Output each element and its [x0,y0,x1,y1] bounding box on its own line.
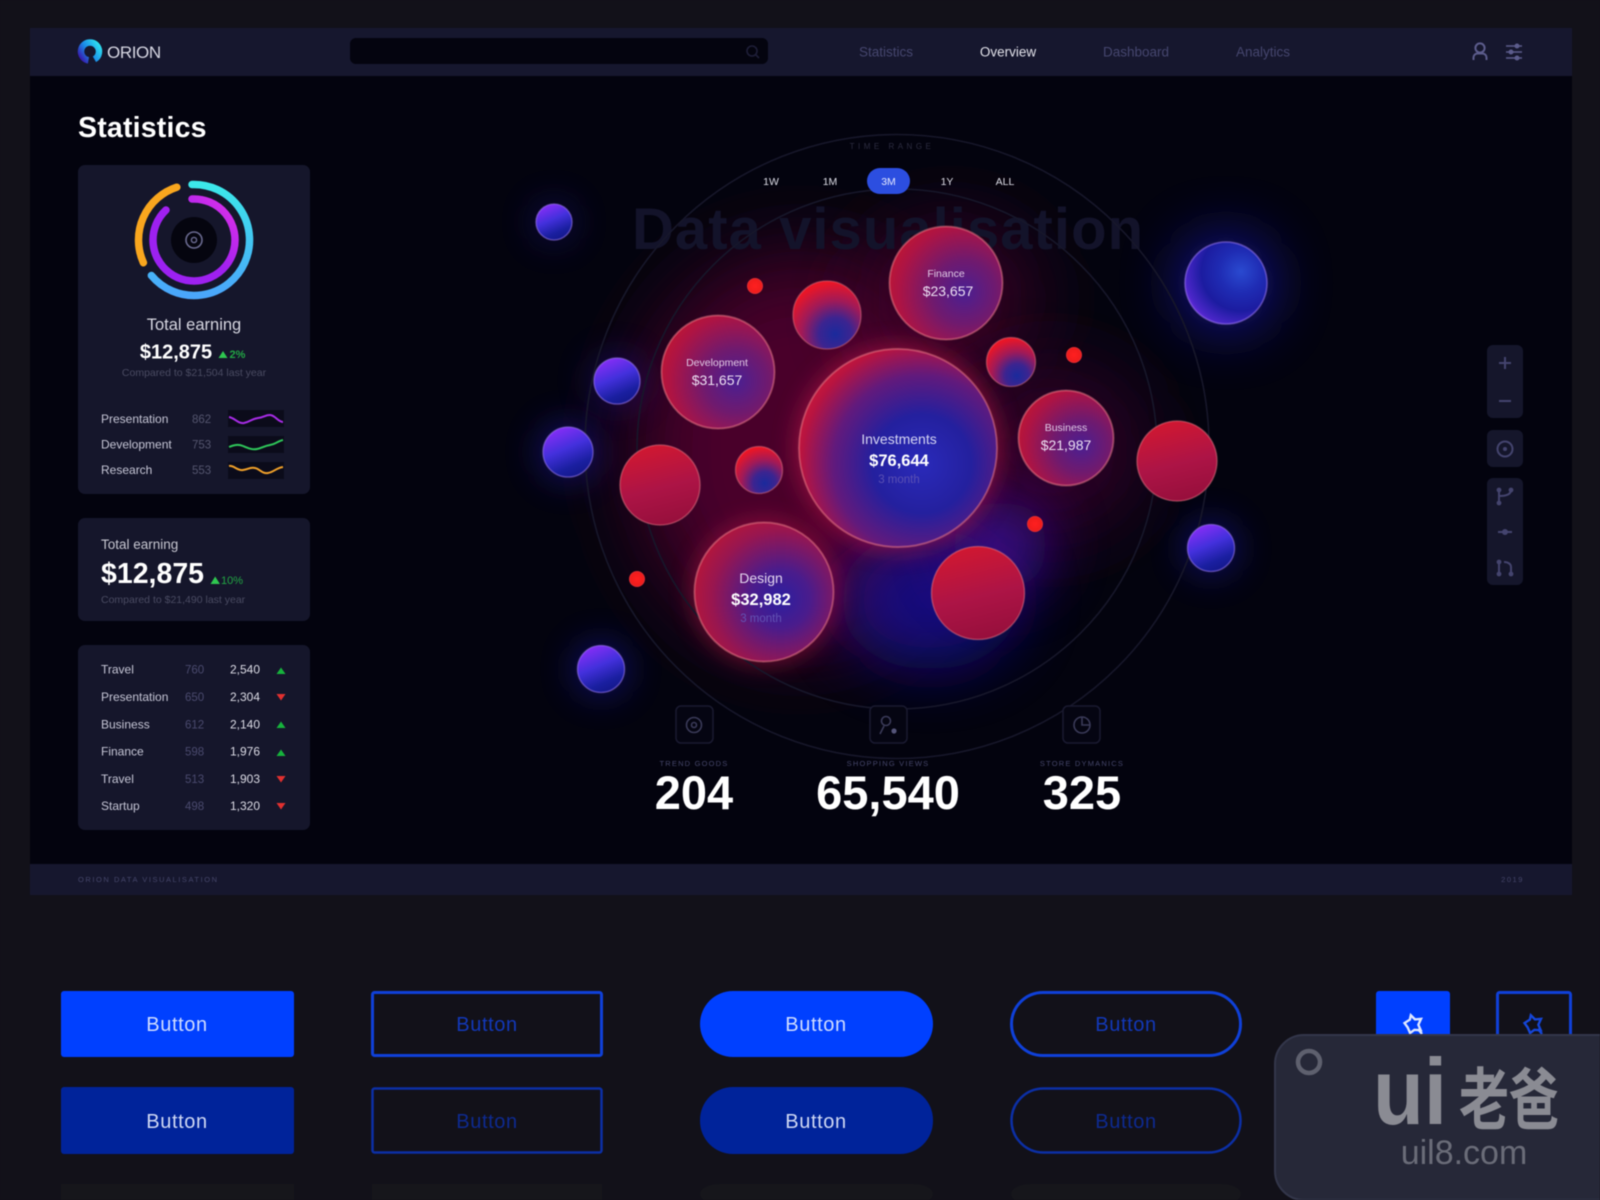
row: Startup: 498 [185,801,204,813]
row: Presentation: Presentation [101,412,168,426]
row: Startup: 1,320 [230,799,260,813]
dot: red lower left [629,571,645,587]
label: Total earning [101,537,178,552]
row: Presentation: Presentation [101,690,168,704]
icon: target [676,706,713,743]
option: 3M active [867,168,910,194]
row: Development: Development [101,438,172,452]
value: 325 [1043,766,1121,819]
tool group: branches [1487,478,1523,585]
stat: store dynamics [1040,706,1124,819]
row: Finance: Finance [101,744,144,758]
site url: uil8.com [1401,1134,1527,1172]
stat: shopping views [816,706,960,819]
row: Travel: Travel [101,772,134,786]
row: Development [101,436,284,453]
bubble: Business [1018,390,1114,486]
bubble: Design: 3 month [740,613,782,625]
row: Finance: 598 [185,746,204,758]
row: Business [101,718,286,732]
row: Research: Research [101,463,152,477]
bubble: Investments: Investments [861,431,937,447]
logo text: CJK: 老爸 [1459,1047,1559,1144]
comparison note: Compared to $21,490 last year [101,594,246,606]
bubble: purple left [543,427,593,477]
bubble: small purple top left [536,204,572,240]
heading: Statistics: Statistics [78,112,207,144]
button: outline square dark: Button [456,1111,518,1133]
bubble: Finance: $23,657 [923,283,974,299]
dot: red lower right [1027,516,1043,532]
footer bar: 2019 [1501,875,1524,884]
change indicator: 10% [221,575,243,587]
row: Presentation: 862 [192,414,211,426]
total earning label: Total earning [147,316,241,334]
bubble: Design: $32,982 [731,591,791,609]
icon: user pin [870,706,907,743]
total earning value: 2% [230,349,246,361]
row: Travel [101,662,286,676]
row: Finance [101,744,286,758]
top navigation bar [30,28,1572,76]
bubble: Investments [799,349,997,547]
bubble: purple bottom left [578,646,624,692]
comparison note: Compared to $21,504 last year [122,367,267,379]
button: outline pill dark: Button [1095,1111,1157,1133]
bubble: mixed small centre left [736,446,782,494]
change indicator [210,575,243,587]
nav: Statistics: Statistics [859,44,913,60]
button: outline square: Button [456,1014,518,1036]
bubble: plain red left [620,445,700,525]
bubble chart [536,204,1267,692]
footer bar [30,864,1572,895]
option: 1M: 1M [823,176,837,188]
row: Presentation: 2,304 [230,690,260,704]
bubble: Investments: 3 month [878,474,920,486]
row: Presentation [101,690,286,704]
donut chart [139,184,250,295]
row: Travel: 2,540 [230,662,260,676]
bubble: Development: Development [686,357,748,369]
bubble: Finance: Finance [927,268,965,280]
button: outline pill dark [1012,1088,1240,1152]
badge hole [1298,1051,1320,1073]
value: 65,540 [816,766,960,819]
search bar [350,38,768,64]
icon: pie [1063,706,1100,743]
row: Travel [101,772,286,786]
button: filled square [61,991,294,1057]
option: 1W: 1W [763,176,779,188]
dashboard panel [30,28,1572,895]
card: total earning summary [78,518,310,621]
dot: red top [747,278,763,294]
icon button: filled [1376,991,1450,1057]
button: outline square dark [372,1088,602,1152]
row: Travel: 1,903 [230,772,260,786]
label: SHOPPING VIEWS [847,759,929,768]
button: filled square dark: Button [146,1111,208,1133]
button: filled pill: Button [785,1014,847,1036]
row: Presentation [101,410,284,427]
bubble: Development [662,316,774,428]
row: Startup: Startup [101,799,140,813]
row: Research [101,462,284,479]
button: outline pill: Button [1095,1014,1157,1036]
bubble: purple upper left [594,358,640,404]
bubble: Design [694,522,834,662]
bubble: Development: $31,657 [692,372,743,388]
watermark badge: uil8.com [1275,1035,1600,1200]
row: Travel: 513 [185,774,204,786]
logo text: ui: ui [1373,1039,1447,1144]
total earning value: $12,875 [140,342,212,364]
row: Finance: 1,976 [230,744,260,758]
row: Business: 612 [185,720,204,732]
footer bar: ORION DATA VISUALISATION [78,875,219,884]
tool: target [1487,430,1523,467]
row: Travel: 760 [185,664,204,676]
bubble: large purple right [1185,242,1267,324]
bubble: Business: $21,987 [1041,437,1092,453]
faint third button row [61,1184,1241,1200]
row: Research: 553 [192,465,211,477]
nav: Overview: Overview [980,44,1036,60]
nav: Analytics: Analytics [1236,44,1290,60]
stat: trend goods [655,706,733,819]
time range selector [763,142,1014,194]
button: filled pill dark [700,1087,933,1154]
icon: user [1474,43,1486,60]
value: $12,875 [101,558,204,590]
icon: sliders [1506,44,1522,60]
bubble: plain red bottom [932,546,1024,640]
row: Business: 2,140 [230,718,260,732]
row: Startup [101,799,286,813]
bubble: mixed small right [986,338,1036,386]
logo: Orion: ORION [107,43,161,62]
button: outline pill [1012,992,1240,1056]
row: Presentation: 650 [185,692,204,704]
bubble: Design: Design [739,570,783,586]
value: 204 [655,766,733,819]
total earning value [140,342,246,364]
icon button: outline [1498,992,1570,1056]
background glow [534,202,1272,695]
button: filled pill [700,991,933,1057]
label: STORE DYMANICS [1040,759,1124,768]
row: Business: Business [101,718,150,732]
dot: red right [1066,347,1082,363]
option: 3M active: 3M [881,176,896,188]
logo: Orion [80,41,161,62]
button: filled pill dark: Button [785,1111,847,1133]
bubble: plain red right [1137,421,1217,501]
bubble: mixed top [793,281,861,349]
label: TREND GOODS [659,759,729,768]
option: 1Y: 1Y [941,176,953,188]
title watermark: Data visualisation: Data visualisation [632,197,1143,262]
row: Development: 753 [192,440,211,452]
time range label: TIME RANGE [850,142,934,151]
tool group: zoom [1487,345,1523,418]
button: outline square [372,992,602,1056]
bubble: purple lower right [1188,524,1234,572]
bubble: Investments: $76,644 [869,452,930,470]
option: ALL: ALL [996,176,1014,188]
row: Travel: Travel [101,662,134,676]
card: category table [78,645,310,830]
orbit rings [585,134,1209,758]
bubble: Finance [890,226,1002,340]
button: filled square: Button [146,1014,208,1036]
nav: Dashboard: Dashboard [1103,44,1169,60]
button: filled square dark [61,1087,294,1154]
bubble: Business: Business [1045,422,1087,434]
card: total earning with donut [78,165,310,494]
